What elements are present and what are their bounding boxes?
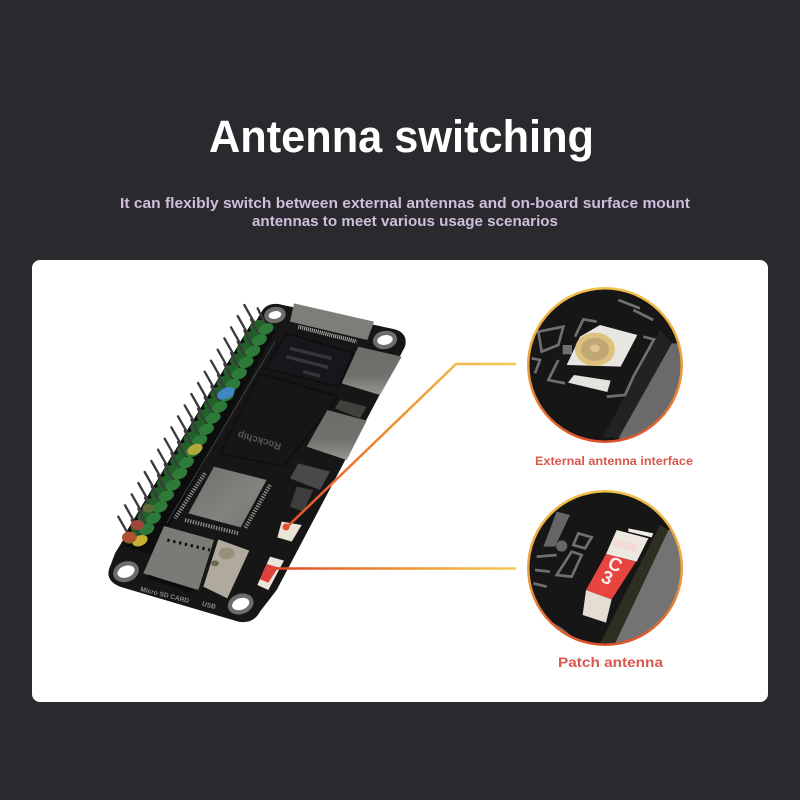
RAM chip [265,333,353,387]
gold ring [575,333,615,366]
board body [108,304,406,622]
C3 marking: C [605,552,625,576]
callout line: external antenna [287,364,516,527]
subtitle: antennas to meet various usage scenarios [252,213,558,230]
FPC connector [290,303,374,340]
C3 marking: 3 [599,566,616,589]
silkscreen labels: USB [201,601,217,611]
SoC marking: Rockchip [236,428,283,451]
USB-C connector upper [342,347,402,395]
patch antenna on board [257,557,284,590]
title: Antenna switching [209,111,594,162]
C3 marking [602,558,622,584]
illustration: development board [108,303,406,622]
subtitle [120,195,690,230]
micro SD slot [143,526,214,590]
circular detail: external antenna interface [527,287,683,443]
wireless module [188,467,267,527]
antenna body [606,530,648,562]
external antenna connector on board [277,522,302,542]
red chip [586,554,636,599]
subtitle: It can flexibly switch between external antennas and on-board surface mount [120,195,690,212]
mounting holes [113,308,396,615]
label: external antenna interface: External antenna interface [535,454,693,468]
silkscreen [532,300,654,397]
silkscreen labels: Micro SD CARD [140,586,190,605]
callout dot: external antenna [282,524,290,530]
USB connector [203,539,249,598]
circular detail: patch antenna [527,490,683,646]
label: patch antenna: Patch antenna [558,654,663,670]
panel: white card [32,260,768,702]
connector pad [567,325,637,367]
silkscreen labels [140,586,217,611]
pin header [118,305,276,549]
board edge [618,343,680,439]
callout line: patch antenna [270,567,516,570]
silkscreen and parts [554,624,570,635]
small components [290,487,313,512]
USB-C connector lower [307,410,367,460]
board edge [616,530,680,643]
RAM markings [287,348,332,376]
pin header base [123,320,275,555]
SoC chip [220,373,338,467]
divider line beside header [167,342,275,523]
